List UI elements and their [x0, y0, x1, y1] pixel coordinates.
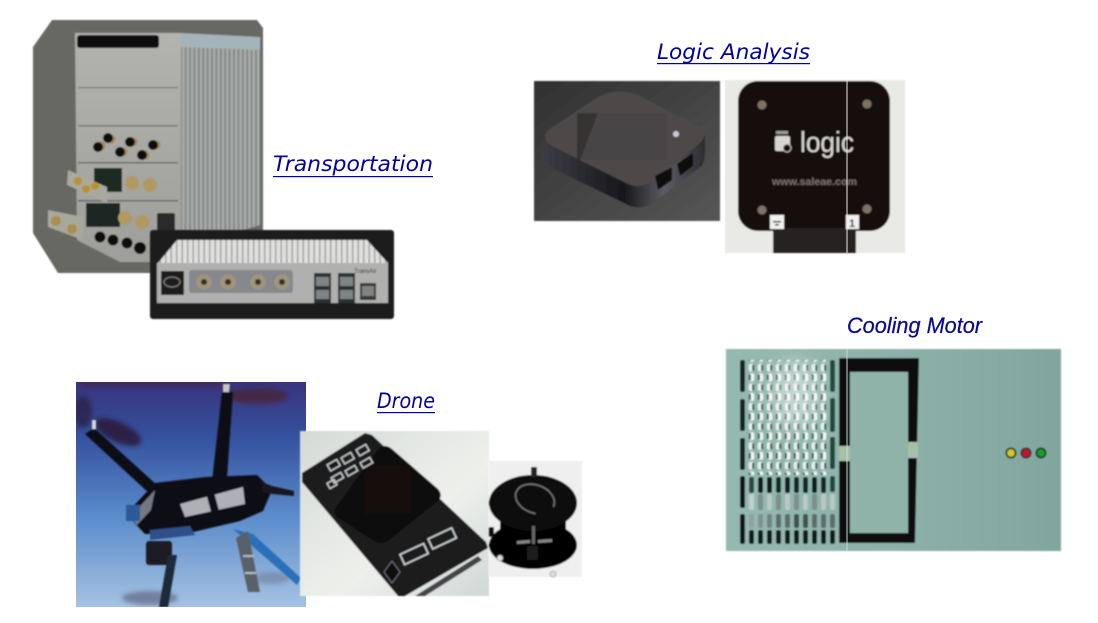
heading: Logic Analysis: Logic Analysis [657, 40, 810, 64]
vent slots [740, 360, 835, 544]
logo text: logic [800, 127, 854, 159]
panel: logic analyzer device top view [534, 81, 720, 221]
panel: gimbal render [489, 461, 582, 577]
pull-out card lower [48, 210, 83, 240]
heading: Cooling Motor: Cooling Motor [847, 313, 984, 338]
drone rotor blur [74, 381, 290, 605]
channel 1 marker: 1 [849, 218, 855, 230]
heading: Transportation: Transportation [273, 152, 433, 176]
chassis connector cluster [86, 133, 175, 254]
panel: cooling motor cabinet [726, 349, 1061, 551]
channel 1 marker [846, 215, 859, 230]
heading: Drone: Drone [377, 389, 435, 413]
chassis front panel [75, 33, 181, 262]
panel: drone photo [74, 381, 306, 607]
unit BNC module plate [189, 270, 293, 293]
pull-out card upper [67, 170, 107, 203]
panel: compact transfer unit photo [150, 230, 394, 319]
unit logo badge [161, 271, 184, 295]
controller top connectors [327, 444, 373, 489]
controller power connectors [400, 528, 456, 565]
drone frame [85, 384, 301, 607]
website text: www.saleae.com [771, 176, 857, 188]
panel: logic analyzer back label [725, 80, 905, 253]
ground marker [770, 215, 784, 229]
controller pin header [384, 561, 400, 583]
gimbal ring [511, 479, 559, 519]
black window frame [839, 358, 919, 543]
unit ethernet ports [314, 273, 376, 303]
indicator lights [1006, 448, 1046, 458]
panel: rack chassis photo [33, 20, 263, 273]
unit model label: TransAir [354, 269, 376, 275]
logo chip icon [775, 131, 791, 152]
panel: flight controller photo [300, 431, 489, 596]
chassis heat-sink fins [180, 33, 260, 250]
